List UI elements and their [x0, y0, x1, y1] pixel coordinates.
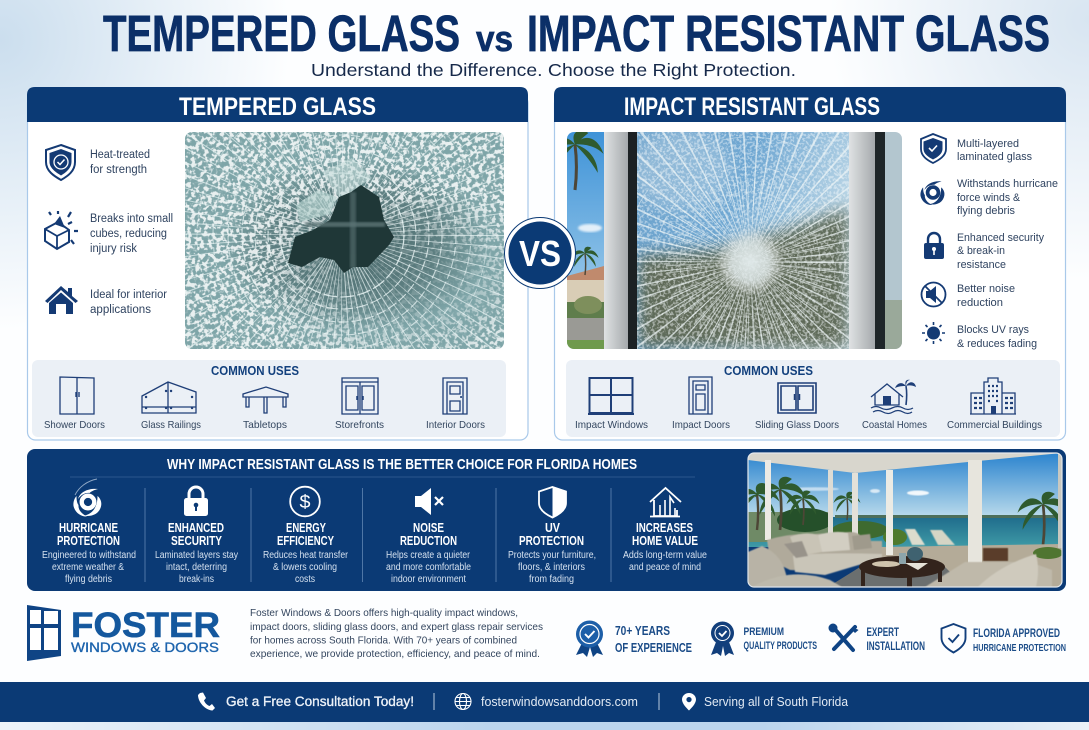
badge: expert installation: INSTALLATION — [866, 641, 925, 653]
benefit: home value: Adds long-term value — [623, 550, 707, 561]
benefit: home value — [623, 488, 707, 573]
benefit: noise reduction: Helps create a quieter — [386, 550, 471, 561]
common uses: tempered — [32, 360, 506, 437]
text: heat-treated: Heat-treated — [90, 149, 150, 161]
benefit: energy efficiency: costs — [295, 574, 315, 585]
benefit: noise reduction: REDUCTION — [400, 534, 457, 548]
benefit: enhanced security: SECURITY — [171, 534, 223, 548]
icon: phone — [198, 692, 215, 710]
benefit: hurricane protection: flying debris — [65, 574, 112, 585]
website: fosterwindowsanddoors.com — [481, 694, 638, 709]
benefit: enhanced security: Laminated layers stay — [155, 550, 238, 561]
benefit: energy efficiency: EFFICIENCY — [277, 534, 335, 548]
use: tabletops: Tabletops — [243, 419, 287, 431]
benefit: energy efficiency: $ — [300, 492, 310, 512]
use: storefronts: Storefronts — [335, 419, 384, 431]
logo: foster windows and doors: WINDOWS & DOORS — [71, 639, 219, 655]
company description: impact doors, sliding glass doors, and expert glass repair services — [250, 621, 543, 633]
heading: common uses: COMMON USES — [724, 363, 813, 378]
service area: Serving all of South Florida — [704, 694, 849, 709]
benefit: hurricane protection: Engineered to withstand — [42, 550, 136, 561]
benefit: uv protection: from fading — [529, 574, 574, 585]
title: TEMPERED GLASS — [103, 5, 460, 62]
text: security: resistance — [957, 259, 1006, 271]
benefit: noise reduction: and more comfortable — [386, 562, 471, 573]
text: interior applications: Ideal for interior — [90, 289, 167, 301]
benefit: noise reduction: NOISE — [413, 521, 444, 535]
icon: noise reduction — [922, 282, 946, 306]
text: uv: & reduces fading — [957, 338, 1037, 350]
use: tabletops — [243, 387, 288, 431]
use: glass railings: Glass Railings — [141, 419, 201, 431]
use: commercial buildings — [947, 378, 1042, 431]
use: interior doors: Interior Doors — [426, 419, 485, 431]
benefit: hurricane protection: HURRICANE — [59, 521, 118, 535]
title — [103, 5, 1050, 62]
photo: impact glass window — [567, 132, 902, 349]
logo: foster windows and doors — [27, 605, 220, 661]
text: interior applications — [90, 289, 167, 316]
icon: sun — [922, 322, 945, 344]
badge: 70+ years — [576, 620, 692, 657]
badge: expert installation — [828, 624, 925, 653]
text: breaks into cubes — [90, 213, 173, 255]
text: heat-treated: for strength — [90, 164, 147, 176]
use: impact doors: Impact Doors — [672, 419, 730, 431]
badge: 70+ years: 70+ YEARS — [615, 623, 670, 638]
deck and floor — [870, 544, 1062, 587]
subtitle: Understand the Difference. Choose the Right Protection. — [311, 60, 796, 80]
use: shower doors: Shower Doors — [44, 419, 105, 431]
benefit: enhanced security — [155, 487, 238, 585]
heading: common uses: COMMON USES — [211, 363, 299, 378]
benefit: uv protection: PROTECTION — [519, 534, 584, 548]
text: noise: reduction — [957, 297, 1003, 309]
icon: globe — [455, 694, 471, 710]
company description — [250, 607, 543, 660]
use: shower doors — [44, 377, 105, 431]
panel header: impact resistant glass: IMPACT RESISTANT GLASS — [624, 93, 880, 121]
text: security — [957, 232, 1045, 271]
benefit: enhanced security: ENHANCED — [168, 521, 224, 535]
text: breaks into cubes: cubes, reducing — [90, 228, 167, 240]
company description: experience, we provide protection, efficiency, and peace of mind. — [250, 648, 540, 660]
badge: expert installation: EXPERT — [866, 627, 899, 639]
text: heat-treated — [90, 149, 150, 176]
title: vs — [476, 18, 513, 59]
benefit: energy efficiency — [263, 487, 349, 585]
icon: hurricane — [920, 181, 944, 205]
benefit: noise reduction — [386, 488, 471, 585]
text: noise: Better noise — [957, 283, 1015, 295]
photo: shattered tempered glass — [185, 132, 504, 349]
use: commercial buildings: Commercial Buildings — [947, 419, 1042, 431]
logo icon: window — [27, 605, 61, 661]
use: glass railings — [141, 382, 201, 431]
text: uv: Blocks UV rays — [957, 324, 1030, 336]
text: laminated: Multi-layered — [957, 138, 1019, 150]
panel header: tempered glass — [27, 87, 528, 122]
use: sliding glass doors: Sliding Glass Doors — [755, 419, 839, 431]
panel header: impact resistant glass — [554, 87, 1066, 122]
benefit: hurricane protection: extreme weather & — [52, 562, 124, 573]
furniture — [748, 529, 1052, 587]
icon: breaking cube — [45, 211, 78, 249]
use: sliding glass doors — [755, 383, 839, 431]
benefit: enhanced security: break-ins — [179, 574, 214, 585]
use: impact windows — [575, 378, 648, 431]
company description: Foster Windows & Doors offers high-quality impact windows, — [250, 607, 518, 619]
icon: house — [45, 286, 78, 314]
use: interior doors — [426, 378, 485, 431]
text: breaks into cubes: injury risk — [90, 243, 137, 255]
use: storefronts — [335, 378, 384, 431]
band heading: WHY IMPACT RESISTANT GLASS IS THE BETTER CHOICE FOR FLORIDA HOMES — [167, 456, 637, 473]
benefit: enhanced security: intact, deterring — [166, 562, 227, 573]
panel: tempered glass — [27, 87, 528, 440]
text: withstands hurricane: flying debris — [957, 205, 1016, 217]
benefit: noise reduction: indoor environment — [391, 574, 466, 585]
icon: lock — [924, 233, 944, 259]
text: breaks into cubes: Breaks into small — [90, 213, 173, 225]
icon: shield check — [46, 145, 75, 180]
logo: foster windows and doors: FOSTER — [71, 606, 220, 645]
badge: premium quality — [711, 622, 817, 656]
text: withstands hurricane — [957, 178, 1058, 217]
company description: for homes across South Florida. With 70+ years of combined — [250, 634, 517, 646]
band: why impact resistant glass — [27, 449, 1068, 591]
benefit: home value: INCREASES — [636, 521, 693, 535]
badge: premium quality: QUALITY PRODUCTS — [744, 640, 817, 652]
icon: pin — [682, 693, 696, 710]
icon: shield check small — [921, 134, 946, 163]
use: coastal homes — [862, 380, 927, 431]
badge: 70+ years: OF EXPERIENCE — [615, 640, 692, 655]
text: laminated: laminated glass — [957, 151, 1033, 163]
benefit: home value: HOME VALUE — [632, 534, 698, 548]
vs badge: VS — [519, 233, 561, 274]
text: laminated — [957, 138, 1033, 163]
table — [859, 547, 945, 587]
badge: florida approved — [942, 624, 1066, 654]
benefit: uv protection: Protects your furniture, — [508, 550, 596, 561]
footer bar — [0, 682, 1089, 722]
benefit: energy efficiency: ENERGY — [286, 521, 326, 535]
vs badge — [504, 218, 576, 288]
use: impact windows: Impact Windows — [575, 419, 648, 431]
photo: waterfront living room — [734, 453, 1068, 587]
text: noise — [957, 283, 1015, 309]
text: withstands hurricane: Withstands hurricane — [957, 178, 1058, 190]
text: withstands hurricane: force winds & — [957, 192, 1021, 204]
text: security: & break-in — [957, 245, 1005, 257]
badge: premium quality: PREMIUM — [744, 626, 784, 638]
panel header: tempered glass: TEMPERED GLASS — [179, 93, 376, 121]
benefit: energy efficiency: & lowers cooling — [273, 562, 337, 573]
benefit: home value: and peace of mind — [629, 562, 701, 573]
text: interior applications: applications — [90, 304, 151, 316]
benefit: uv protection — [508, 487, 596, 585]
text: uv — [957, 324, 1037, 350]
cta text: Get a Free Consultation Today! — [226, 694, 414, 709]
text: security: Enhanced security — [957, 232, 1045, 244]
panel: impact resistant glass — [546, 87, 1066, 440]
benefit: uv protection: UV — [545, 521, 561, 535]
common uses: impact — [566, 360, 1060, 437]
use: coastal homes: Coastal Homes — [862, 419, 927, 431]
shattered hole — [288, 158, 394, 273]
benefit: uv protection: floors, & interiors — [518, 562, 585, 573]
benefit: energy efficiency: Reduces heat transfer — [263, 550, 349, 561]
use: impact doors — [672, 377, 730, 431]
benefit: hurricane protection — [42, 479, 136, 585]
benefit: hurricane protection: PROTECTION — [57, 534, 120, 548]
